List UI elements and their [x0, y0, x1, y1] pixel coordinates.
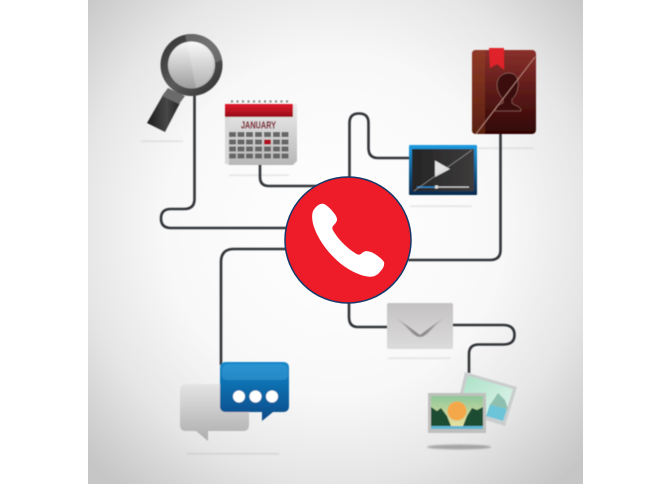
- line: contacts to phone: [408, 133, 500, 260]
- phone handset: [312, 204, 384, 277]
- front photo: [428, 393, 486, 433]
- icon: envelope: [387, 303, 453, 349]
- magnifier handle: [147, 95, 180, 132]
- line: magnifier to phone: [161, 95, 290, 228]
- line: envelope to photos: [452, 325, 514, 373]
- red circle: [285, 177, 411, 303]
- magnifier lens: [168, 42, 215, 88]
- icon: contact book: [472, 48, 536, 134]
- icon: calendar: [225, 100, 297, 165]
- line: calendar to phone: [260, 164, 322, 186]
- book bookmark: [489, 48, 504, 70]
- play button: [435, 160, 450, 177]
- calendar month: JANUARY: [241, 120, 276, 132]
- item shadows: [141, 140, 534, 455]
- envelope body: [387, 303, 453, 349]
- icon: phone button: [285, 177, 411, 303]
- calendar red band: [225, 104, 293, 117]
- lake: [431, 426, 483, 429]
- calendar page: [225, 104, 297, 165]
- typing dots: [233, 390, 245, 402]
- icon: photos: [427, 372, 517, 450]
- book cover: [472, 50, 536, 134]
- progress bar: [417, 186, 469, 188]
- trees: [431, 407, 483, 426]
- diagonal sheen: [476, 57, 535, 134]
- calendar rings: [231, 100, 288, 103]
- background panel: [88, 0, 583, 484]
- icon: speech bubbles: [180, 362, 289, 441]
- sun: [448, 402, 466, 420]
- magnifier ring: [160, 34, 222, 96]
- line: messages to phone: [221, 249, 290, 365]
- envelope flap: [398, 319, 442, 336]
- book spine: [472, 50, 485, 134]
- icon: magnifying glass: [147, 34, 222, 132]
- connector lines: [161, 95, 514, 373]
- icon: video player: [409, 145, 477, 195]
- video screen: [412, 149, 474, 191]
- video frame: [409, 145, 477, 195]
- blue bubble gloss: [222, 364, 288, 380]
- diagonal sheen: [414, 150, 472, 191]
- blue bubble: [220, 362, 289, 421]
- line: video to phone: [350, 114, 411, 180]
- back photo: [456, 372, 517, 426]
- person silhouette: [495, 73, 521, 111]
- gray bubble: [180, 384, 249, 441]
- line: envelope to phone: [349, 300, 388, 327]
- calendar day grid: [229, 132, 288, 158]
- photo shadow: [427, 444, 491, 450]
